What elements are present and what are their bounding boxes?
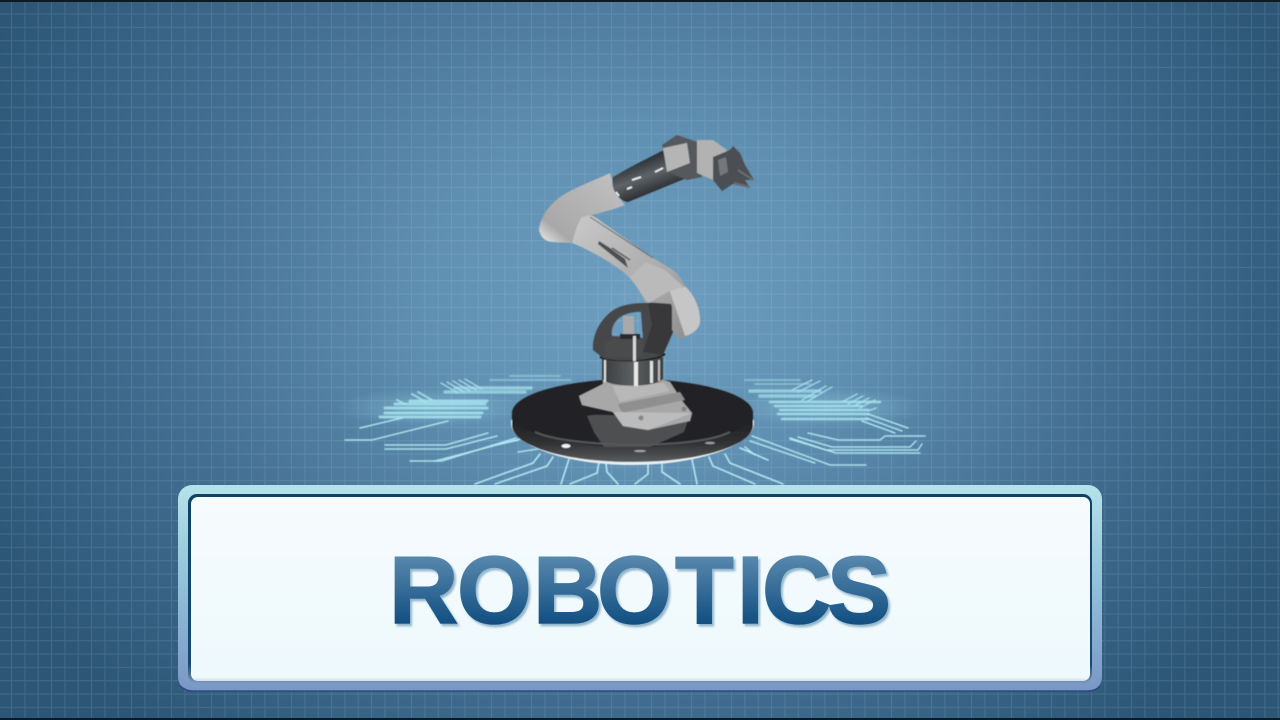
cast base [579,380,692,430]
wrist joint [662,135,727,180]
circuit traces around the platform [335,376,925,484]
bottom radial traces [475,440,783,484]
title text: ROBOTICS [389,537,891,644]
black cylinder forearm [612,148,694,202]
lower arm [572,215,700,339]
robot arm on platform [511,135,754,465]
shoulder housing with opening [593,302,675,361]
platform disc [511,379,754,465]
left circuit bands [380,376,570,417]
panel frame [178,485,1102,691]
gripper [713,146,754,191]
panel inner edge [188,494,1092,683]
upper arm [539,173,625,243]
circuit glow [335,388,925,428]
title panel [178,485,1102,691]
right circuit lines [745,414,925,465]
right circuit bands [745,380,880,419]
left circuit lines [345,418,538,461]
panel face [191,497,1090,681]
rotating drum [600,354,665,386]
